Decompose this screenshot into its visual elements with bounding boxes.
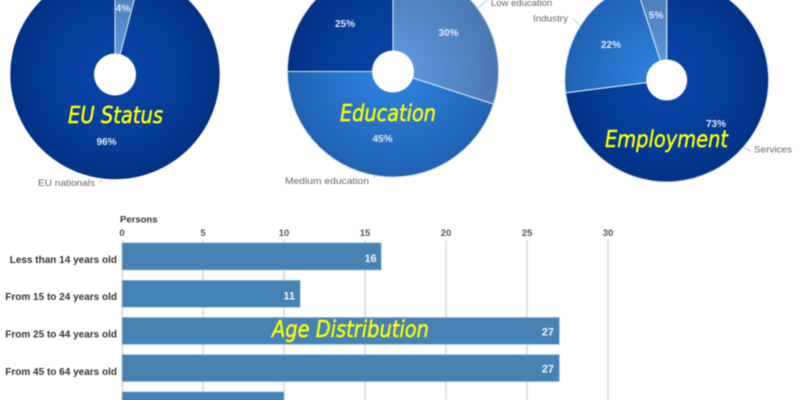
bar: from 25 to 44 years old, 27 [5,317,559,344]
slice: medium education 45% [287,72,494,177]
axis tick labels: 10 [279,228,289,239]
donut hole [372,50,414,92]
label: EU nationals: EU nationals [38,178,95,189]
heading: EU Status: EU Status [68,101,163,129]
bar: less than 14 years old, 16 [10,243,381,270]
slice: agriculture 5% [635,0,667,80]
axis title: Persons: Persons [120,214,158,226]
leader line: industry [573,19,580,25]
bar: from 45 to 64 years old, 27: From 45 to 64 years old [5,367,117,378]
axis tick labels: 25 [522,228,533,239]
panel: Employment donut chart [533,0,792,182]
slice: high education 25% [287,0,393,71]
panel: EU status donut chart [10,0,220,189]
bar: from 25 to 44 years old, 27: 27 [542,327,554,339]
heading: Age Distribution: Age Distribution [270,315,429,343]
heading: Education: Education [340,99,436,127]
leader line: medium education [374,175,377,178]
value: 5%: 5% [649,10,663,22]
axis grid lines [122,240,608,400]
donut hole [646,60,687,100]
slice: services 73% [566,0,769,182]
label: Industry: Industry [533,14,568,24]
heading: Employment: Employment [605,125,729,153]
bar: less than 14 years old, 16: Less than 14 years old [10,255,117,266]
leader line: low education [477,0,487,9]
label: Services: Services [754,144,792,156]
bar: from 15 to 24 years old, 11: 11 [283,291,295,303]
bar: from 45 to 64 years old, 27 [5,355,559,382]
bar: from 15 to 24 years old, 11 [5,280,300,307]
axis tick labels: 0 [119,228,125,239]
panel: Education donut chart [285,0,552,187]
bar: oldest age group, 10 [122,392,284,400]
axis tick labels: 5 [200,228,206,239]
slice: non-EU nationals 4% [115,0,141,74]
bar: from 25 to 44 years old, 27: From 25 to 44 years old [5,330,117,340]
bar: from 15 to 24 years old, 11: From 15 to 24 years old [5,292,117,303]
panel: Age distribution bar chart [5,214,613,400]
value: 30%: 30% [438,28,459,39]
leader line: EU nationals [99,180,102,183]
label: Medium education: Medium education [285,176,369,187]
axis tick labels [119,228,613,239]
value: 96%: 96% [96,137,117,148]
bar: less than 14 years old, 16: 16 [364,253,377,265]
bar: from 45 to 64 years old, 27: 27 [542,364,554,376]
axis tick labels: 20 [441,228,451,239]
leader line: services [743,147,751,151]
value: 22%: 22% [601,40,621,51]
slice: EU nationals 96% [10,0,220,179]
slice: industry 22% [565,0,667,93]
slice: low education 30% [393,0,499,104]
donut hole [94,54,136,96]
value: 4%: 4% [116,4,130,14]
value: 25%: 25% [335,19,355,30]
value: 45%: 45% [372,134,393,145]
axis tick labels: 15 [360,228,371,239]
axis tick labels: 30 [603,228,613,239]
value: 73%: 73% [706,119,726,130]
